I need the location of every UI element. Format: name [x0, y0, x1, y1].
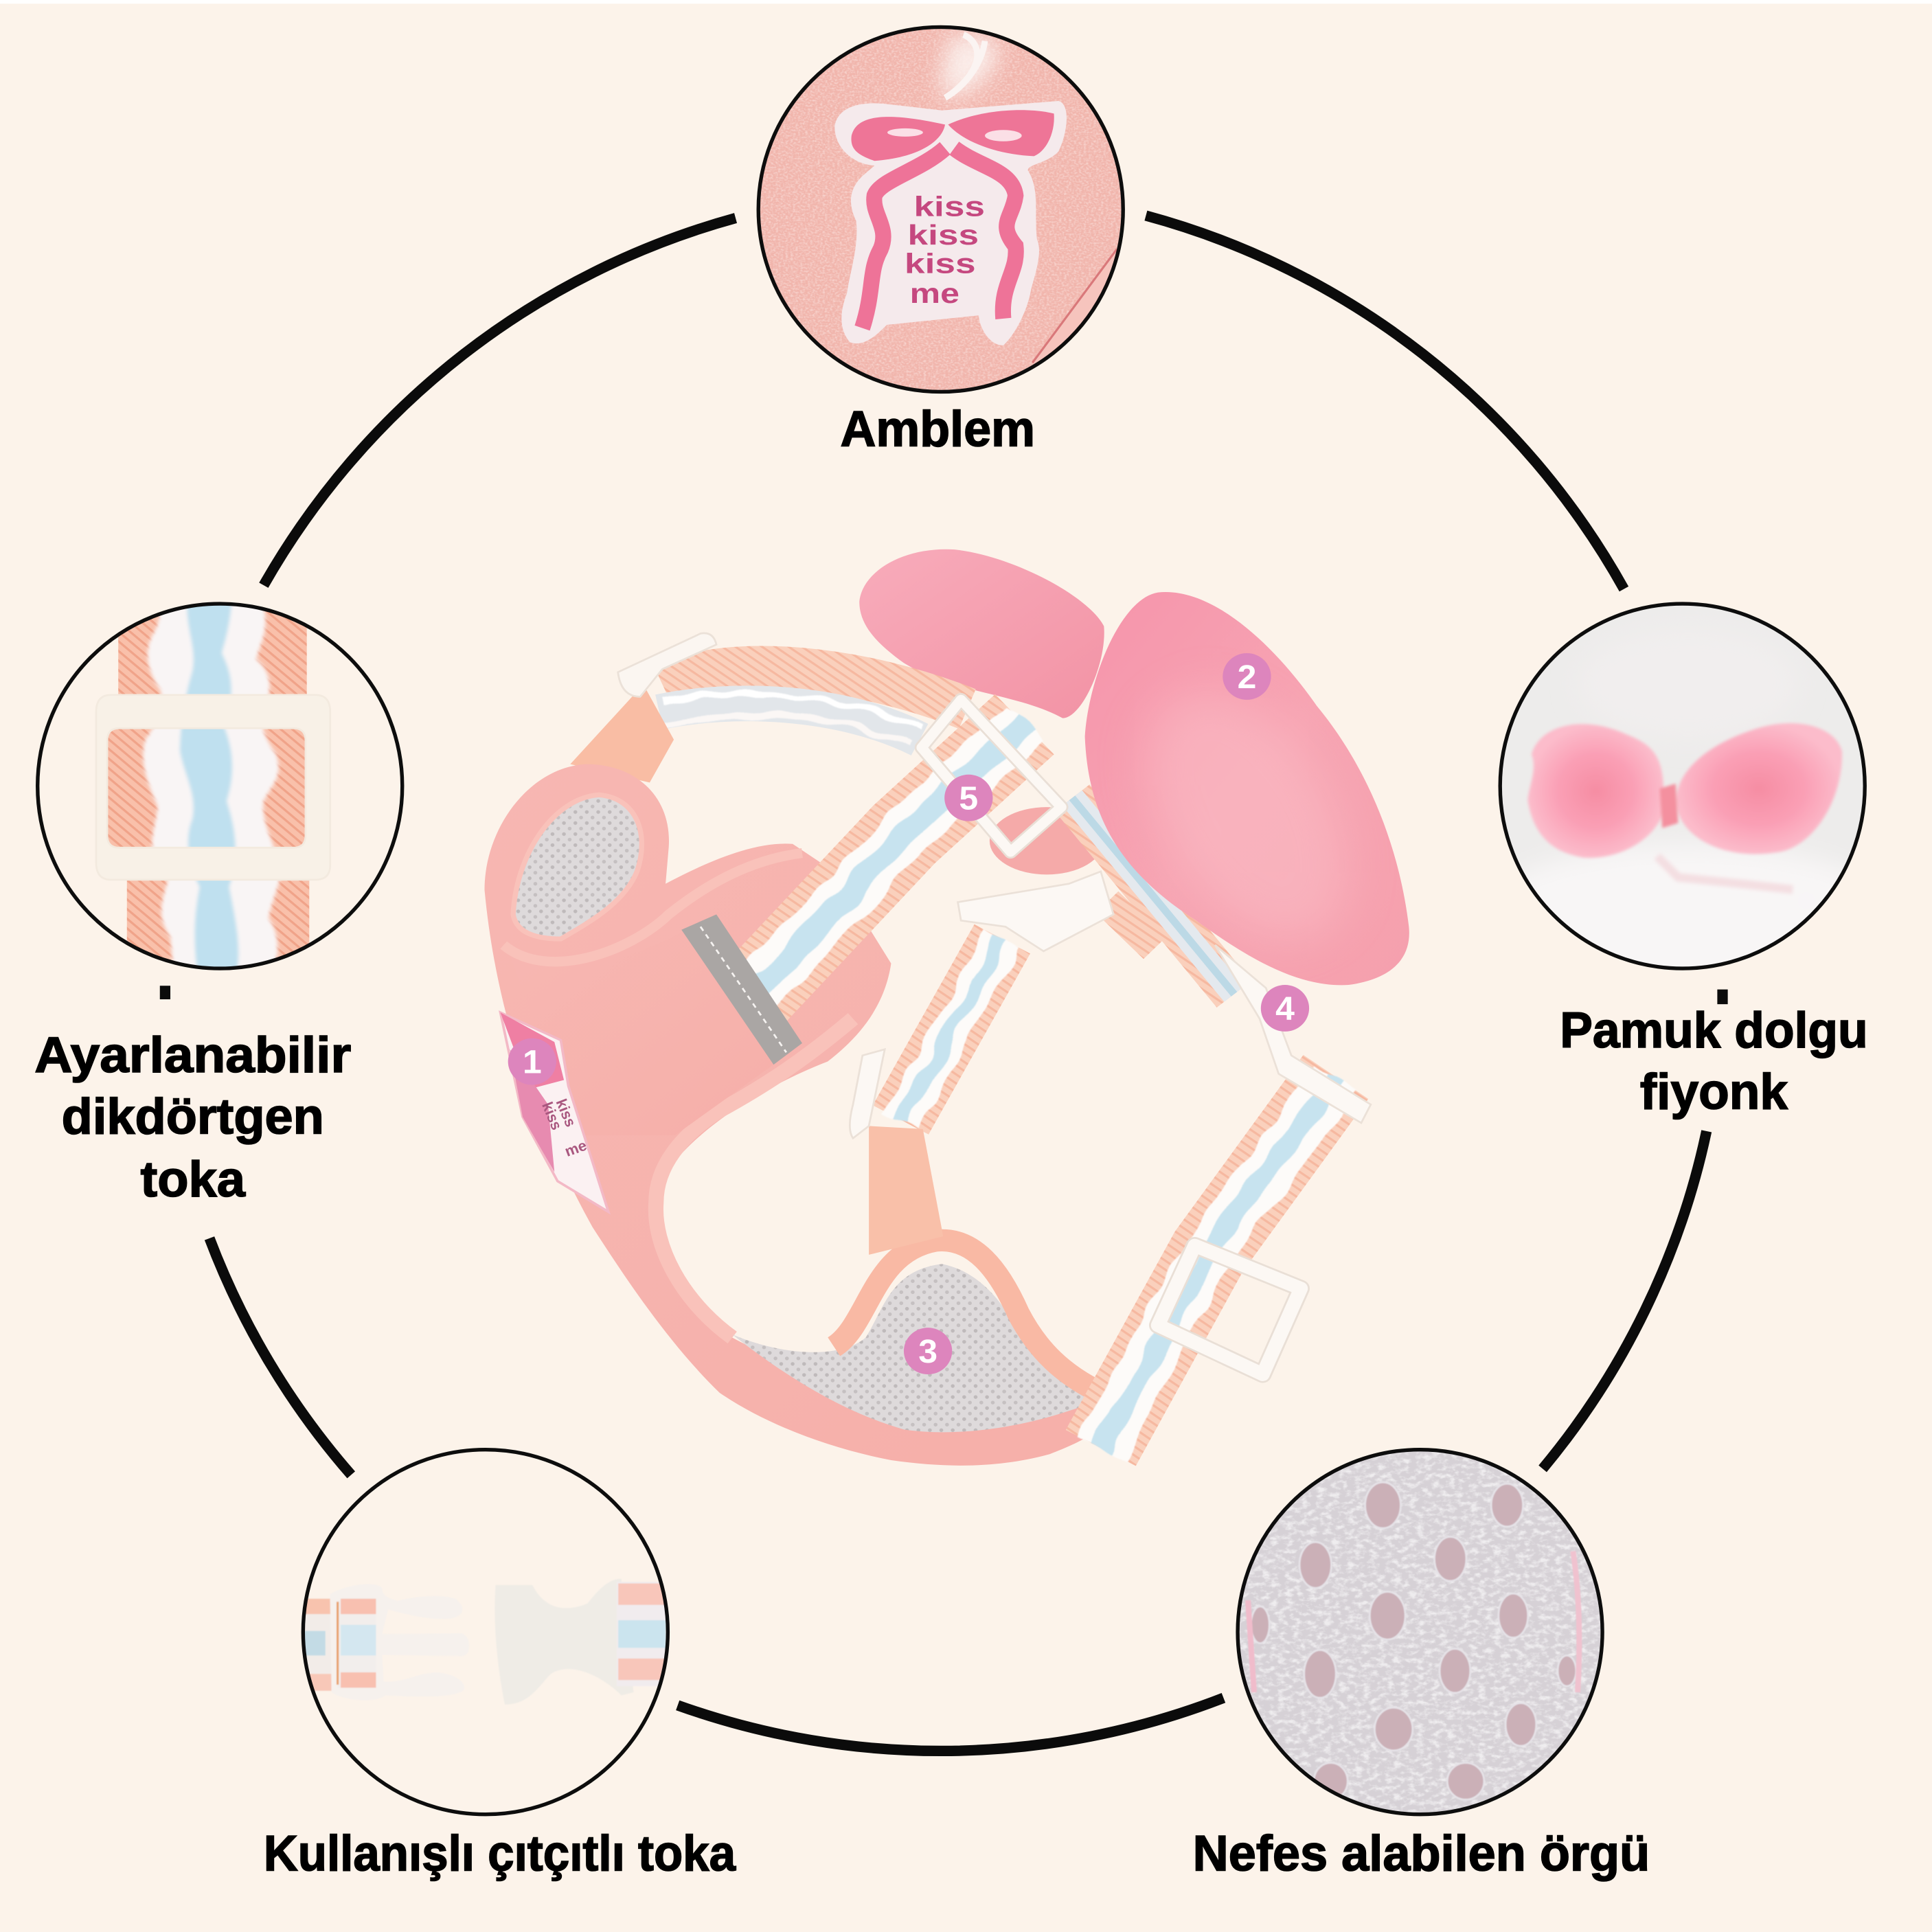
emblem patch on vest: [501, 1012, 609, 1212]
badge 1: 1: [523, 1044, 542, 1080]
icon: slider buckle 5: [922, 700, 1061, 852]
main diagonal strap: [751, 725, 1025, 997]
panel: snap buckle circle: [302, 1450, 668, 1815]
lower-right strap: [1101, 1077, 1336, 1448]
icon: top slider: [618, 633, 716, 696]
badge 5: 5: [959, 780, 978, 817]
vest neckline rim: [503, 853, 802, 962]
emblem patch on vest: kiss: [538, 1100, 566, 1133]
panel: amblem circle: [757, 25, 1125, 394]
central harness illustration: [484, 549, 1409, 1466]
icon: buckle female part: [495, 1579, 666, 1705]
emblem patch on vest: kiss: [552, 1096, 580, 1129]
badge 2: 2: [1238, 659, 1256, 696]
label: Ayarlanabilir dikdörtgen toka: [34, 1026, 351, 1207]
label: Kullanışlı çıtçıtlı toka: Kullanışlı çıtçıtlı toka: [264, 1824, 736, 1881]
label: Nefes alabilen örgü: Nefes alabilen örgü: [1193, 1824, 1650, 1881]
chest cup rim: [834, 1240, 1101, 1393]
small pink knot: [990, 807, 1104, 874]
badge 3: [904, 1328, 952, 1374]
label: Pamuk dolgu fiyonk: fiyonk: [1640, 1063, 1788, 1120]
label: Ayarlanabilir dikdörtgen toka: toka: [141, 1150, 246, 1207]
patch text: kiss: [913, 192, 985, 223]
patch text: kiss: [908, 220, 979, 251]
peach lower connector: [869, 1126, 943, 1255]
label: Amblem: Amblem: [841, 400, 1035, 457]
reflective strip: [681, 914, 802, 1065]
label: Ayarlanabilir dikdörtgen toka: dikdörtgen: [62, 1087, 324, 1144]
icon: left small slider: [850, 1049, 885, 1138]
front plush bow: [1085, 592, 1409, 985]
upper back strap: [659, 668, 967, 746]
panel: plush bow circle: [1499, 602, 1867, 970]
badge 4: [1261, 985, 1309, 1032]
badge 5: [944, 775, 992, 821]
badge 2: [1223, 653, 1271, 700]
badge 1: [508, 1038, 556, 1085]
patch text: me: [910, 278, 959, 309]
back strap to buckle 4: [1072, 798, 1234, 994]
patch text: [907, 196, 984, 304]
middle-left strap: [900, 939, 1002, 1120]
badge 4: 4: [1275, 991, 1295, 1027]
icon: plush bow: [1528, 723, 1842, 858]
panel: rectangular buckle circle: [38, 598, 402, 973]
back bow lobe: [859, 549, 1104, 718]
badge 3: 3: [918, 1334, 937, 1370]
icon: slider buckle: [96, 695, 330, 880]
icon: lower slider: [1158, 1246, 1301, 1374]
icon: embroidered bow patch: [834, 101, 1067, 345]
peach connector strap: [570, 685, 674, 782]
panel: breathable mesh circle: [1232, 1442, 1608, 1823]
label: Ayarlanabilir dikdörtgen toka: Ayarlanabilir: [34, 1026, 351, 1083]
icon: buckle male part: [330, 1584, 469, 1701]
label: Pamuk dolgu fiyonk: [1560, 1001, 1868, 1120]
label: Pamuk dolgu fiyonk: Pamuk dolgu: [1560, 1001, 1868, 1058]
icon: buckle 4: [1215, 945, 1371, 1123]
vest body: [484, 764, 1120, 1466]
neck opening mesh: [513, 795, 641, 939]
patch text: kiss: [905, 249, 976, 279]
emblem patch on vest: me: [562, 1137, 589, 1160]
connecting ring: [165, 216, 1723, 1751]
icon: side-release buckle: [958, 872, 1113, 951]
chest mesh: [732, 1264, 1101, 1432]
vest shoulder flap: [507, 931, 773, 1135]
